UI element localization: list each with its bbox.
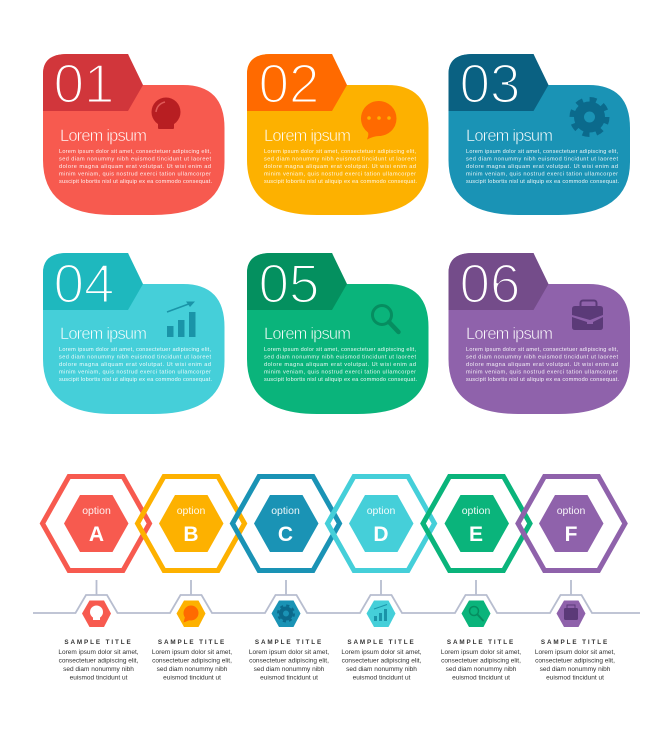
sample column D: euismod tincidunt ut <box>353 674 411 682</box>
sample column F: consectetuer adipiscing elit, <box>535 658 615 664</box>
card 02 number: 02 <box>258 52 320 114</box>
panel: card 03 <box>448 52 630 215</box>
card 06 heading: Lorem ipsum <box>466 325 553 343</box>
hexagon option B <box>138 476 244 570</box>
card 06 text: sed diam nonummy nibh euismod tincidunt ut laoreet <box>466 354 618 360</box>
card 05 text: minim veniam, quis nostrud exerci tation ullamcorper <box>264 370 416 376</box>
sample column A: euismod tincidunt ut <box>70 674 128 682</box>
card 02 text: sed diam nonummy nibh euismod tincidunt ut laoreet <box>264 156 416 162</box>
hexagon option E: option <box>462 505 490 517</box>
card 05 text: sed diam nonummy nibh euismod tincidunt ut laoreet <box>264 354 416 360</box>
sample column D: consectetuer adipiscing elit, <box>342 658 422 664</box>
card 01 number: 01 <box>54 52 114 114</box>
sample column D: Lorem ipsum dolor sit amet, <box>341 649 422 656</box>
timeline icon B: speech bubble <box>176 600 206 627</box>
sample column D <box>341 639 422 682</box>
icon: growth chart <box>167 302 196 337</box>
card 01 text: minim veniam, quis nostrud exerci tation ullamcorper <box>59 172 211 178</box>
card 01 text <box>59 149 212 185</box>
icon: speech bubble <box>361 101 396 140</box>
card 02 heading: Lorem ipsum <box>264 127 351 145</box>
card 02 body <box>247 54 428 215</box>
hexagon option C <box>232 476 340 570</box>
sample column C: Lorem ipsum dolor sit amet, <box>249 649 329 656</box>
icon: light bulb <box>152 98 180 129</box>
card 01 text: Lorem ipsum dolor sit amet, consectetuer adipiscing elit, <box>59 149 211 155</box>
card 02 text: dolore magna aliquam erat volutpat. Ut wisi enim ad <box>264 164 416 170</box>
card 01 text: suscipit lobortis nisl ut aliquip ex ea commodo consequat. <box>59 179 212 185</box>
card 01 body <box>43 54 224 215</box>
card 05 body <box>247 253 428 414</box>
hexagon option E <box>423 476 530 570</box>
card 04 number: 04 <box>54 252 114 314</box>
card 01 text: dolore magna aliquam erat volutpat. Ut wisi enim ad <box>59 164 211 170</box>
card 03 number: 03 <box>460 52 520 114</box>
sample column C: euismod tincidunt ut <box>260 674 318 682</box>
sample column A: sed diam nonummy nibh <box>63 666 134 673</box>
card 03 body <box>448 54 630 215</box>
hexagon option A <box>42 476 150 570</box>
card 02 text <box>264 149 417 185</box>
card 04 text <box>59 347 212 383</box>
hexagon option D: D <box>373 523 389 546</box>
timeline icon F: briefcase <box>556 600 586 627</box>
sample column B: Lorem ipsum dolor sit amet, <box>152 649 232 656</box>
card 06 number tab <box>448 253 548 310</box>
card 03 text <box>466 149 619 185</box>
panel: card 01 <box>43 52 224 215</box>
hexagon option E: E <box>469 523 483 546</box>
card 03 heading: Lorem ipsum <box>466 127 553 145</box>
card 05 text: suscipit lobortis nisl ut aliquip ex ea commodo consequat. <box>264 377 417 383</box>
card 04 text: Lorem ipsum dolor sit amet, consectetuer adipiscing elit, <box>59 347 211 353</box>
card 03 text: minim veniam, quis nostrud exerci tation ullamcorper <box>466 172 618 178</box>
card 06 text: minim veniam, quis nostrud exerci tation ullamcorper <box>466 370 618 376</box>
sample column B: consectetuer adipiscing elit, <box>152 658 232 664</box>
hexagon option B: B <box>183 523 199 546</box>
card 05 number tab <box>247 253 347 310</box>
hexagon option A: A <box>89 523 104 546</box>
timeline icon A: bulb <box>82 600 111 627</box>
card 06 text <box>466 347 619 383</box>
sample column A: consectetuer adipiscing elit, <box>59 658 139 664</box>
card 06 number: 06 <box>460 252 520 314</box>
card 04 text: minim veniam, quis nostrud exerci tation ullamcorper <box>59 370 211 376</box>
sample column F <box>535 639 615 682</box>
card 02 text: suscipit lobortis nisl ut aliquip ex ea commodo consequat. <box>264 179 417 185</box>
timeline icon C: gear <box>272 600 300 627</box>
card 02 text: minim veniam, quis nostrud exerci tation ullamcorper <box>264 172 416 178</box>
sample column B <box>152 639 232 682</box>
card 06 text: suscipit lobortis nisl ut aliquip ex ea commodo consequat. <box>466 377 619 383</box>
card 06 body <box>448 253 630 414</box>
card 06 text: dolore magna aliquam erat volutpat. Ut wisi enim ad <box>466 362 618 368</box>
icon: gear <box>572 100 607 134</box>
sample column C: SAMPLE TITLE <box>255 639 323 646</box>
icon: magnifier <box>372 306 398 332</box>
sample column F: euismod tincidunt ut <box>546 674 604 682</box>
card 03 text: dolore magna aliquam erat volutpat. Ut wisi enim ad <box>466 164 618 170</box>
sample column E <box>441 639 521 682</box>
sample column F: SAMPLE TITLE <box>541 639 609 646</box>
card 01 text: sed diam nonummy nibh euismod tincidunt ut laoreet <box>59 156 211 162</box>
card 05 text <box>264 347 417 383</box>
sample column E: consectetuer adipiscing elit, <box>441 658 521 664</box>
card 05 number: 05 <box>258 252 320 314</box>
sample column C <box>249 639 329 682</box>
hexagon option D <box>328 476 434 570</box>
sample column E: euismod tincidunt ut <box>452 674 510 682</box>
card 02 text: Lorem ipsum dolor sit amet, consectetuer adipiscing elit, <box>264 149 416 155</box>
sample column F: sed diam nonummy nibh <box>540 666 611 673</box>
timeline with connector bumps <box>33 580 640 613</box>
card 03 text: Lorem ipsum dolor sit amet, consectetuer adipiscing elit, <box>466 149 618 155</box>
card 04 number tab <box>43 253 143 310</box>
card 05 text: dolore magna aliquam erat volutpat. Ut wisi enim ad <box>264 362 416 368</box>
sample column D: SAMPLE TITLE <box>347 639 416 646</box>
panel: card 04 <box>43 252 224 414</box>
sample column B: SAMPLE TITLE <box>158 639 226 646</box>
sample column F: Lorem ipsum dolor sit amet, <box>535 649 615 656</box>
timeline icon D: chart <box>366 600 396 627</box>
sample column D: sed diam nonummy nibh <box>346 666 417 673</box>
sample column B: euismod tincidunt ut <box>163 674 221 682</box>
hexagon option B: option <box>177 505 205 517</box>
card 03 text: sed diam nonummy nibh euismod tincidunt ut laoreet <box>466 156 618 162</box>
hexagon option D: option <box>367 505 395 517</box>
card 03 number tab <box>448 54 548 111</box>
sample column E: SAMPLE TITLE <box>447 639 515 646</box>
sample column E: Lorem ipsum dolor sit amet, <box>441 649 521 656</box>
card 02 number tab <box>247 54 347 111</box>
panel: card 02 <box>247 52 428 215</box>
icon: briefcase <box>572 300 603 330</box>
card 04 text: sed diam nonummy nibh euismod tincidunt ut laoreet <box>59 354 211 360</box>
sample column E: sed diam nonummy nibh <box>446 666 517 673</box>
card 04 body <box>43 253 224 414</box>
card 05 heading: Lorem ipsum <box>264 325 351 343</box>
hexagon option C: option <box>271 505 300 517</box>
card 05 text: Lorem ipsum dolor sit amet, consectetuer adipiscing elit, <box>264 347 416 353</box>
timeline icon E: magnifier <box>462 600 490 627</box>
card 04 heading: Lorem ipsum <box>60 325 147 343</box>
sample column A <box>58 639 139 682</box>
card 04 text: dolore magna aliquam erat volutpat. Ut wisi enim ad <box>59 362 211 368</box>
hexagon option F: F <box>565 523 578 546</box>
panel: card 05 <box>247 252 428 414</box>
hexagon option A: option <box>82 505 111 517</box>
sample column C: consectetuer adipiscing elit, <box>249 658 329 664</box>
hexagon option F <box>518 476 625 570</box>
card 06 text: Lorem ipsum dolor sit amet, consectetuer adipiscing elit, <box>466 347 618 353</box>
hexagon option C: C <box>278 523 293 546</box>
sample column A: Lorem ipsum dolor sit amet, <box>58 649 139 656</box>
hexagon option F: option <box>557 505 585 517</box>
card 03 text: suscipit lobortis nisl ut aliquip ex ea commodo consequat. <box>466 179 619 185</box>
card 01 number tab <box>43 54 143 111</box>
card 04 text: suscipit lobortis nisl ut aliquip ex ea commodo consequat. <box>59 377 212 383</box>
sample column A: SAMPLE TITLE <box>64 639 133 646</box>
sample column B: sed diam nonummy nibh <box>157 666 228 673</box>
panel: card 06 <box>448 252 630 414</box>
card 01 heading: Lorem ipsum <box>60 127 147 145</box>
sample column C: sed diam nonummy nibh <box>254 666 325 673</box>
